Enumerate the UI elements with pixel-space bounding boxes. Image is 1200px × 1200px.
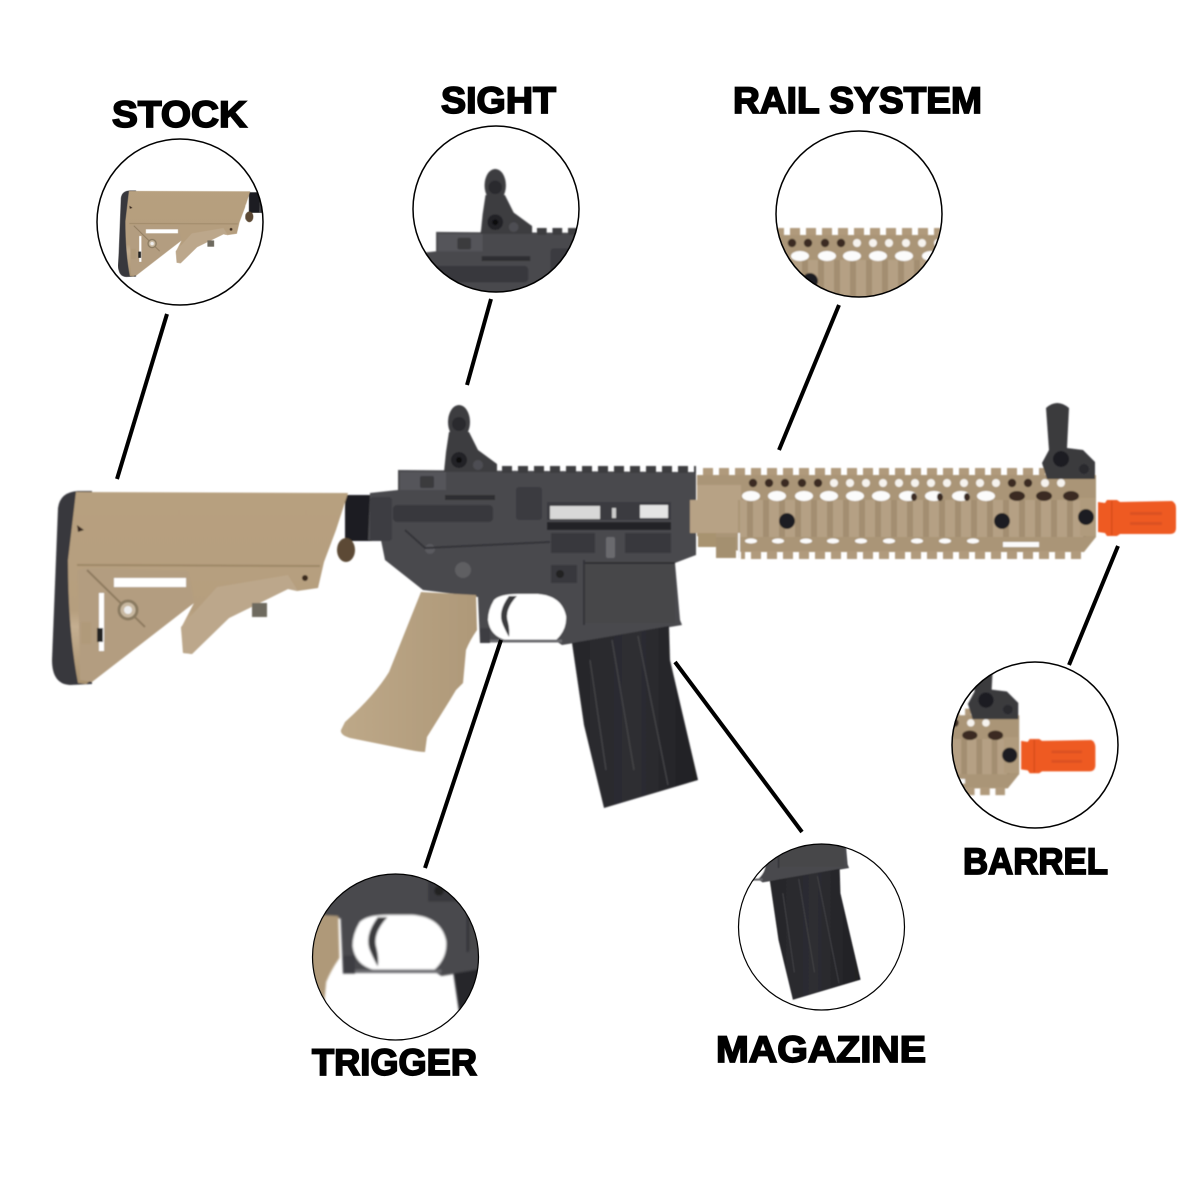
orange muzzle xyxy=(1098,500,1176,536)
buffer tube xyxy=(345,495,375,541)
upper and lower receiver xyxy=(368,466,696,645)
leader line: sight xyxy=(467,299,491,385)
detail circle: trigger xyxy=(312,873,480,1041)
rail handguard xyxy=(690,468,1096,559)
magazine xyxy=(572,626,698,808)
stock xyxy=(52,491,355,685)
rear sight xyxy=(444,405,497,472)
label: sight: SIGHT xyxy=(441,80,556,121)
small holes row xyxy=(749,479,1032,487)
pistol grip xyxy=(341,592,477,752)
oval holes row xyxy=(742,491,995,501)
leader line: magazine xyxy=(675,662,802,832)
rifle illustration xyxy=(52,403,1176,808)
detail circle: sight xyxy=(412,125,580,293)
label: rail system: RAIL SYSTEM xyxy=(733,80,982,121)
leader line: rail system xyxy=(779,305,839,450)
leader line: trigger xyxy=(425,640,501,868)
leader line: barrel xyxy=(1069,546,1118,665)
label: magazine: MAGAZINE xyxy=(716,1029,926,1070)
leader line: stock xyxy=(117,314,167,479)
detail circle: magazine xyxy=(738,843,906,1011)
detail circle: barrel xyxy=(951,661,1119,829)
label: trigger: TRIGGER xyxy=(312,1042,477,1083)
trigger xyxy=(501,596,517,637)
lower holes row xyxy=(745,538,1039,547)
front sight xyxy=(1042,403,1095,479)
screws xyxy=(779,513,795,529)
label: stock: STOCK xyxy=(112,94,247,135)
trigger guard opening xyxy=(488,594,566,640)
detail circle: stock xyxy=(96,138,264,306)
detail circle: rail system xyxy=(775,130,943,298)
label: barrel: BARREL xyxy=(963,841,1108,882)
